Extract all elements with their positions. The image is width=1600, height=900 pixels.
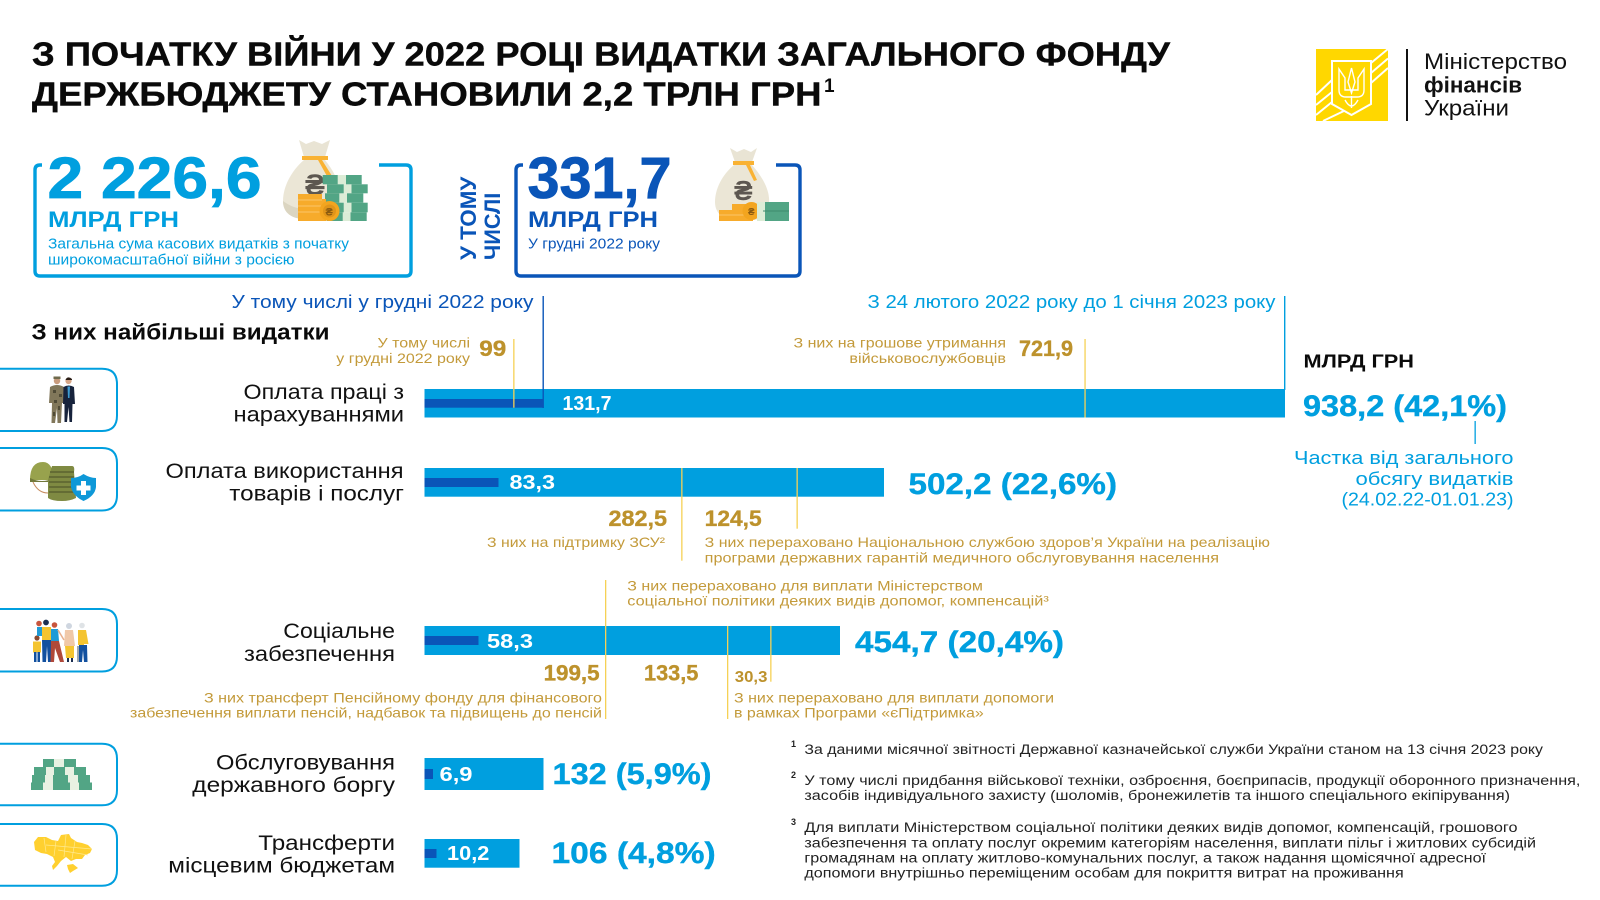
category label: забезпечення	[244, 643, 395, 666]
icon card: family	[0, 609, 117, 672]
annotation: 124,5	[705, 468, 1270, 566]
logo: Ministry of Finance of Ukraine: України	[1424, 96, 1509, 120]
annotation: 133,5	[605, 578, 1049, 719]
title: З ПОЧАТКУ ВІЙНИ У 2022 РОЦІ ВИДАТКИ ЗАГАЛЬНОГО ФОНДУ	[32, 34, 1171, 72]
bar	[424, 758, 544, 790]
footnote 1: 1	[791, 739, 796, 749]
annotation: 199,5: З них трансферт Пенсійному фонду для фінансового	[204, 690, 602, 706]
total description	[48, 236, 350, 268]
icon: small money bag	[715, 148, 789, 221]
annotation: 133,5: З них перераховано для виплати Міністерством	[627, 578, 983, 594]
icon card: helmet, vest, shield	[0, 448, 117, 510]
bar	[424, 626, 840, 655]
title: ДЕРЖБЮДЖЕТУ СТАНОВИЛИ 2,2 ТРЛН ГРН	[32, 76, 821, 112]
total value: 2 226,6	[48, 146, 262, 211]
footnotes	[791, 739, 1580, 880]
footnote 3: Для виплати Міністерством соціальної політики деяких видів допомог, компенсацій, грошового	[804, 820, 1518, 835]
annotation: 282,5	[487, 468, 682, 561]
logo: Ministry of Finance of Ukraine: фінансів	[1424, 72, 1522, 98]
logo: Ministry of Finance of Ukraine: Міністерство	[1424, 49, 1567, 74]
label: including: У ТОМУ	[456, 176, 481, 260]
footnote 1: За даними місячної звітності Державної казначейської служби України станом на 13 січня 2023 року	[804, 742, 1543, 757]
annotation: 30,3: З них перераховано для виплати допомоги	[734, 690, 1054, 706]
category label: Оплата використання	[166, 460, 404, 483]
footnote 1	[791, 739, 1543, 757]
icon card: soldier and civil servant	[0, 369, 117, 431]
annotation: 721,9: 721,9	[1019, 336, 1073, 361]
panel: total expenditure	[35, 140, 411, 276]
row: goods and services	[0, 448, 1270, 566]
annotation: 199,5	[130, 660, 602, 721]
annotation: 124,5: 124,5	[705, 506, 762, 531]
value: 502,2 (22,6%)	[908, 468, 1117, 501]
label: including: ЧИСЛІ	[480, 193, 505, 260]
bar	[424, 389, 1285, 418]
title	[32, 34, 1171, 112]
total unit: МЛРД ГРН	[48, 207, 179, 232]
annotation: December 99: у грудні 2022 року	[336, 350, 470, 366]
category label	[192, 752, 396, 797]
bar: 6,9	[440, 763, 472, 786]
icon: small money bag: ₴	[748, 207, 755, 218]
icon card: map of Ukraine	[0, 824, 117, 886]
row: debt service	[0, 744, 712, 805]
footnote 3: 3	[791, 817, 796, 827]
footnote 2: 2	[791, 770, 796, 780]
category label	[168, 832, 395, 878]
icon: money bag with coins and bills: ₴	[326, 206, 334, 218]
total description: широкомасштабної війни з росією	[48, 252, 295, 268]
icon: money bag with coins and bills: ₴	[305, 169, 325, 202]
annotation: 721,9: З них на грошове утримання	[794, 335, 1006, 351]
category label	[166, 460, 404, 506]
title: 1	[824, 76, 835, 97]
row: wages	[0, 292, 1514, 510]
December description: У грудні 2022 року	[528, 236, 661, 252]
footnote 2	[791, 770, 1580, 803]
annotation: 199,5: 199,5	[544, 660, 600, 686]
value: 132 (5,9%)	[552, 758, 712, 791]
annotation: 133,5: 133,5	[644, 660, 698, 686]
December unit: МЛРД ГРН	[528, 207, 658, 232]
icon card: stacks of bills	[0, 744, 117, 805]
footnote 3: забезпечення та оплату послуг окремим категоріям населення, виплати пільг і житлових субсидій	[804, 836, 1536, 850]
icon: small money bag: ₴	[734, 175, 753, 206]
section heading: З них найбільші видатки	[32, 320, 330, 344]
bar: 58,3	[487, 630, 533, 653]
callout: share note: обсягу видатків	[1356, 468, 1514, 489]
annotation: 30,3	[727, 626, 1054, 721]
category label: Соціальне	[283, 620, 395, 643]
annotation: 30,3: 30,3	[735, 669, 768, 686]
category label: Обслуговування	[216, 752, 395, 774]
bar: 131,7	[562, 392, 612, 415]
annotation: 124,5: програми державних гарантій медичного обслуговування населення	[705, 550, 1219, 566]
category label: місцевим бюджетам	[168, 854, 395, 878]
value: 106 (4,8%)	[552, 837, 716, 870]
category label	[244, 620, 395, 666]
icon: money bag with coins and bills	[283, 140, 368, 221]
annotation: 30,3: в рамках Програми «єПідтримка»	[734, 705, 984, 721]
annotation: December 99: У тому числі	[378, 335, 470, 351]
legend: full period: З 24 лютого 2022 року до 1 січня 2023 року	[868, 292, 1276, 312]
bar	[424, 468, 884, 497]
category label	[234, 381, 404, 426]
legend: December period: У тому числі у грудні 2022 року	[232, 292, 534, 312]
panel: December 2022	[516, 146, 800, 276]
footnote 3: громадянам на оплату житлово-комунальних послуг, а також надання щомісячної адресної	[804, 850, 1486, 866]
footnote 3: допомоги внутрішньо переміщеним особам для покриття витрат на проживання	[804, 866, 1404, 880]
total description: Загальна сума касових видатків з початку	[48, 236, 350, 252]
category label: Оплата праці з	[244, 381, 404, 404]
annotation: 282,5: 282,5	[608, 506, 667, 531]
footnote 2: засобів індивідуального захисту (шоломів, бронежилетів та іншого спеціального екіпірування)	[804, 788, 1510, 803]
category label: державного боргу	[192, 774, 396, 797]
row: local budget transfers	[0, 824, 716, 886]
annotation: 282,5: З них на підтримку ЗСУ²	[487, 534, 665, 550]
annotation: December 99	[336, 335, 514, 408]
value: 938,2 (42,1%)	[1303, 390, 1507, 423]
category label: Трансферти	[258, 832, 395, 855]
row: social security	[0, 578, 1064, 721]
annotation: 721,9: військовослужбовців	[849, 350, 1006, 366]
annotation: 721,9	[794, 335, 1086, 418]
label: including	[456, 176, 505, 260]
bar	[424, 839, 520, 868]
category label: нарахуваннями	[234, 404, 404, 426]
annotation: 133,5: соціальної політики деяких видів допомог, компенсацій³	[627, 593, 1049, 609]
callout: share note	[1294, 421, 1514, 510]
footnote 2: У тому числі придбання військової техніки, озброєння, боєприпасів, продукції оборонного призначення,	[804, 773, 1580, 788]
value: 454,7 (20,4%)	[855, 626, 1064, 659]
logo: Ministry of Finance of Ukraine	[1316, 49, 1567, 121]
bar: 83,3	[510, 471, 555, 494]
unit label: МЛРД ГРН	[1304, 350, 1414, 372]
December value: 331,7	[528, 146, 672, 211]
annotation: December 99: 99	[479, 336, 506, 361]
bar: 10,2	[447, 842, 489, 865]
callout: share note: Частка від загального	[1294, 447, 1514, 468]
annotation: 199,5: забезпечення виплати пенсій, надбавок та підвищень до пенсій	[130, 705, 602, 721]
category label: товарів і послуг	[229, 482, 404, 506]
annotation: 124,5: З них перераховано Національною службою здоров’я України на реалізацію	[705, 534, 1270, 550]
callout: share note: (24.02.22-01.01.23)	[1342, 488, 1514, 510]
footnote 3	[791, 817, 1536, 880]
